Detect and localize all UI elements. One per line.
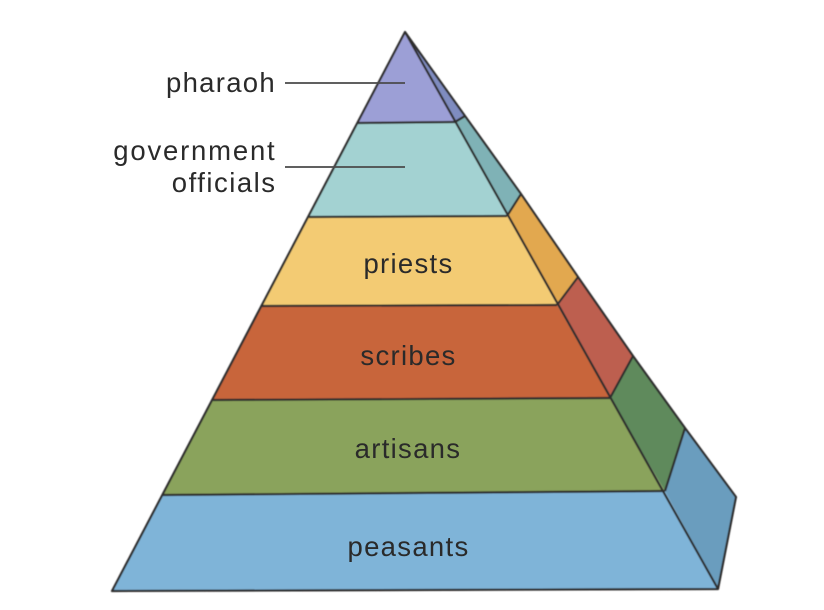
pyramid xyxy=(112,32,736,591)
label: government officials: government xyxy=(113,135,276,166)
label: pharaoh: pharaoh xyxy=(166,67,276,98)
tier: peasants xyxy=(112,428,736,591)
tier: government officials xyxy=(308,116,521,217)
label: priests: priests xyxy=(363,248,454,279)
leader line: government officials xyxy=(285,166,405,168)
tier: artisans xyxy=(162,356,685,495)
tier: priests xyxy=(261,194,578,306)
label: government officials: officials xyxy=(172,167,276,198)
label: artisans: artisans xyxy=(355,433,461,464)
label: scribes: scribes xyxy=(360,340,457,371)
leader line: pharaoh xyxy=(285,82,405,84)
pyramid outlines xyxy=(112,32,736,591)
tier: pharaoh xyxy=(357,33,465,123)
label: peasants: peasants xyxy=(347,531,470,562)
tier: scribes xyxy=(212,277,633,400)
